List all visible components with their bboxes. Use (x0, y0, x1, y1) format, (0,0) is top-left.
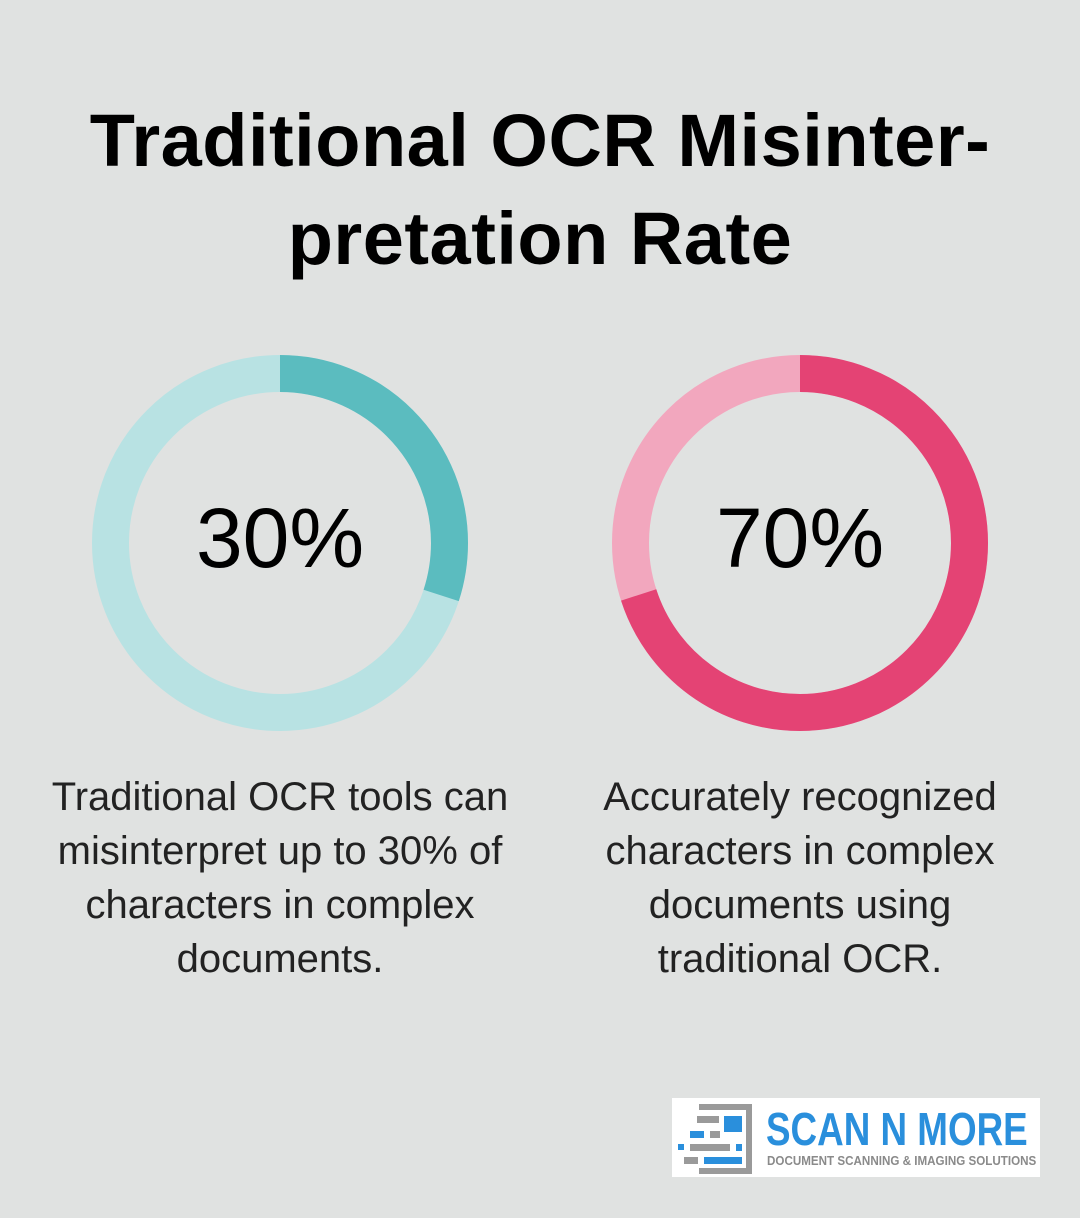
logo tagline: DOCUMENT SCANNING & IMAGING SOLUTIONS (767, 1154, 1036, 1168)
title: Traditional OCR Misinter- (90, 99, 990, 182)
number 70%: 70% (716, 491, 884, 585)
logo icon (678, 1104, 752, 1174)
left donut (110, 374, 450, 712)
text right: Accurately recognized characters in complex documents using traditional OCR. (603, 775, 997, 981)
number 30%: 30% (196, 491, 364, 585)
logo name: SCAN N MORE (766, 1103, 1028, 1155)
text left: Traditional OCR tools can misinterpret up to 30% of characters in complex documents. (52, 775, 508, 981)
title (90, 99, 990, 280)
logo (672, 1098, 1040, 1177)
right donut (630, 374, 970, 712)
title: pretation Rate (288, 197, 792, 280)
